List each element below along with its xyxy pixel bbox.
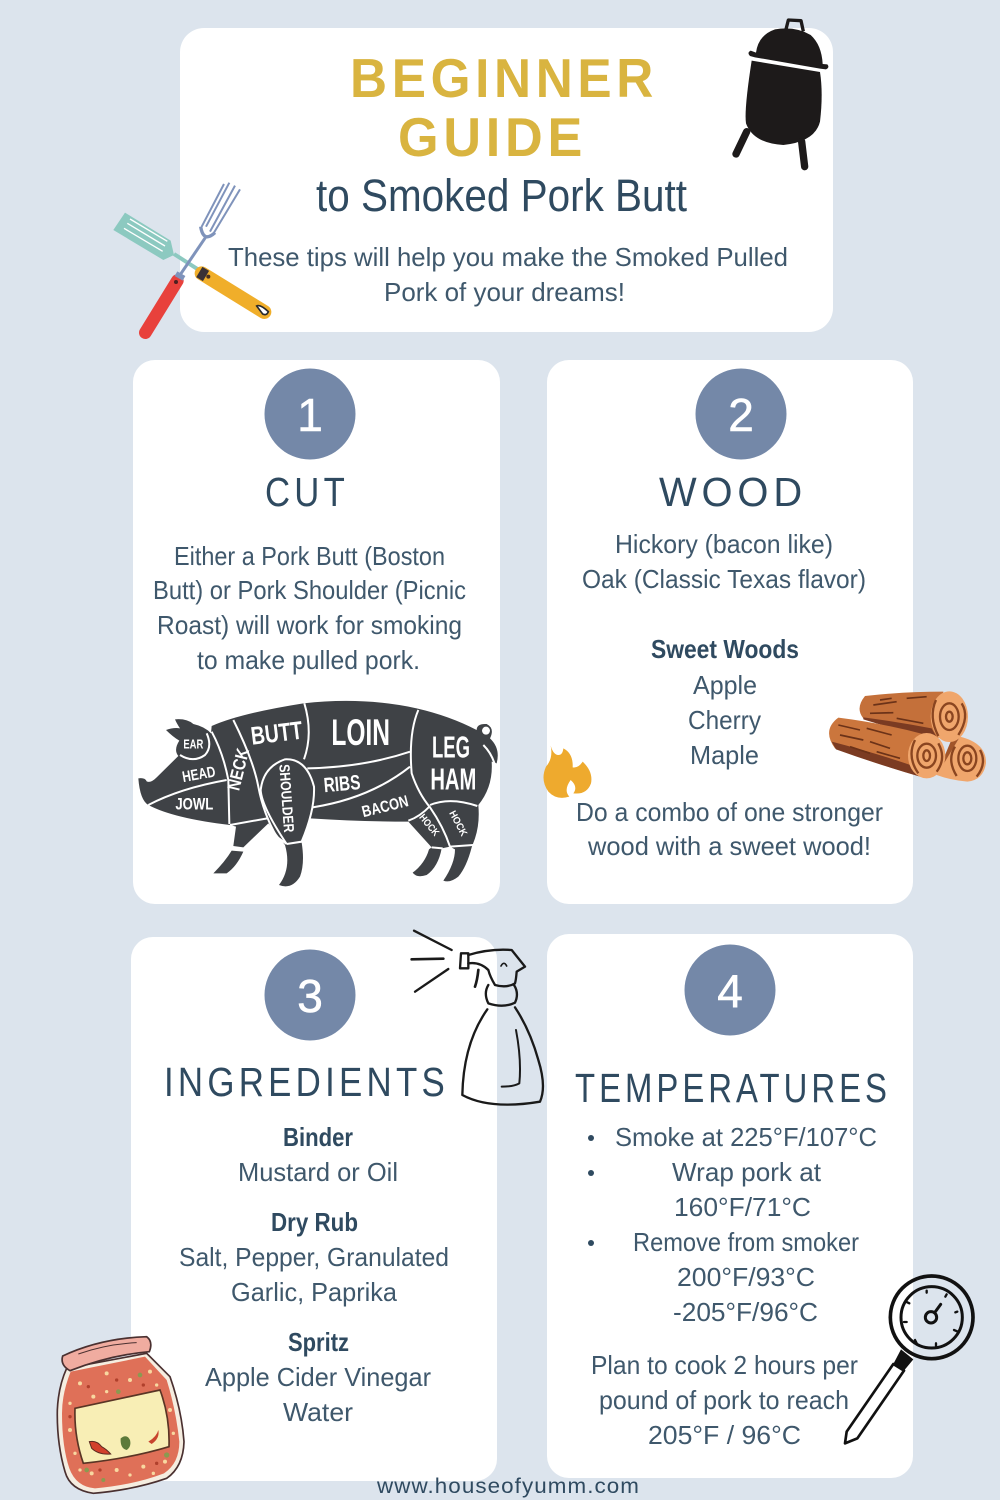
title: Beginner Guide: BEGINNER [350, 47, 658, 109]
heading: cut: CUT [265, 469, 349, 515]
cooking time note: Plan to cook 2 hours per [591, 1350, 858, 1380]
pig butcher chart: HEAD [181, 764, 217, 786]
cut description: to make pulled pork. [197, 645, 420, 675]
pig butcher chart: HAM [430, 762, 476, 796]
cooking time note: pound of pork to reach [599, 1385, 849, 1415]
temperature bullet list: -205°F/96°C [673, 1297, 818, 1327]
sweet woods list: Cherry [688, 705, 761, 735]
title: Beginner Guide: GUIDE [398, 106, 587, 168]
cut description [153, 541, 466, 675]
number badge 2: 2 [728, 389, 754, 441]
pig butcher chart: LOIN [331, 711, 390, 753]
spritz [205, 1327, 431, 1427]
icon: flame [543, 746, 591, 798]
number badge 1 [264, 368, 356, 460]
panel: cut [133, 360, 500, 904]
pig butcher chart: JOWL [175, 794, 213, 813]
number badge 1: 1 [297, 389, 323, 441]
panel: ingredients [131, 937, 497, 1481]
temperature bullet list [588, 1122, 877, 1327]
icon: stacked logs [829, 691, 986, 782]
spritz: Spritz [288, 1327, 349, 1357]
strong woods list [582, 529, 866, 594]
panel: wood [547, 360, 913, 904]
pig butcher chart: BACON [360, 793, 410, 821]
spritz: Water [283, 1397, 353, 1427]
pig butcher chart: NECK [223, 746, 253, 792]
number badge 3: 3 [297, 970, 323, 1022]
sweet woods list: Sweet Woods [651, 634, 799, 664]
sweet woods list: Apple [693, 670, 757, 700]
pig butcher chart [138, 701, 498, 886]
strong woods list: Hickory (bacon like) [615, 529, 833, 559]
temperature bullet list: 160°F/71°C [674, 1192, 811, 1222]
cut description: Butt) or Pork Shoulder (Picnic [153, 575, 466, 605]
sweet woods list [651, 634, 799, 770]
temperature bullet list: Wrap pork at [672, 1157, 822, 1187]
intro text: These tips will help you make the Smoked Pulled [228, 242, 788, 272]
pig butcher chart: HOCK [446, 809, 469, 839]
temperature bullet list: Smoke at 225°F/107°C [615, 1122, 877, 1152]
title: Beginner Guide [350, 47, 658, 168]
dry rub [179, 1207, 449, 1307]
cut description: Roast) will work for smoking [157, 610, 462, 640]
pig butcher chart: SHOULDER [275, 764, 296, 833]
pig butcher chart: HOCK [416, 812, 441, 839]
cooking time note: 205°F / 96°C [648, 1420, 801, 1450]
binder: Mustard or Oil [238, 1157, 398, 1187]
temperature bullet list: Remove from smoker [633, 1227, 859, 1257]
heading: ingredients: INGREDIENTS [164, 1059, 449, 1105]
icon: spray bottle [412, 931, 543, 1105]
number badge 4 [684, 944, 776, 1036]
cut description: Either a Pork Butt (Boston [174, 541, 445, 571]
pig butcher chart: BUTT [249, 717, 304, 751]
icon: spice jar [57, 1337, 184, 1493]
dry rub: Salt, Pepper, Granulated [179, 1242, 449, 1272]
dry rub: Garlic, Paprika [231, 1277, 398, 1307]
pig butcher chart: LEG [432, 731, 470, 765]
dry rub: Dry Rub [271, 1207, 358, 1237]
intro text: Pork of your dreams! [384, 277, 625, 307]
strong woods list: Oak (Classic Texas flavor) [582, 564, 866, 594]
intro text [228, 242, 788, 307]
temperature bullet list: 200°F/93°C [677, 1262, 815, 1292]
binder [238, 1122, 398, 1187]
icon: smoker grill [736, 20, 828, 167]
panel: temperatures [547, 934, 913, 1478]
combo tip: Do a combo of one stronger [576, 797, 883, 827]
subtitle: to Smoked Pork Butt [316, 170, 687, 221]
combo tip [576, 797, 883, 861]
number badge 4: 4 [717, 965, 743, 1017]
spritz: Apple Cider Vinegar [205, 1362, 431, 1392]
icon: crossed spatula and fork [113, 183, 268, 333]
number badge 2 [696, 368, 786, 460]
icon: meat thermometer [845, 1276, 973, 1443]
number badge 3 [264, 950, 356, 1040]
heading: wood: WOOD [659, 469, 807, 515]
binder: Binder [283, 1122, 353, 1152]
pig butcher chart: EAR [183, 737, 203, 751]
combo tip: wood with a sweet wood! [587, 831, 871, 861]
panel: header [180, 28, 833, 332]
sweet woods list: Maple [690, 740, 759, 770]
pig butcher chart: RIBS [323, 771, 361, 797]
footer url: www.houseofyumm.com [376, 1475, 640, 1498]
heading: temperatures: TEMPERATURES [575, 1065, 891, 1111]
cooking time note [591, 1350, 858, 1450]
